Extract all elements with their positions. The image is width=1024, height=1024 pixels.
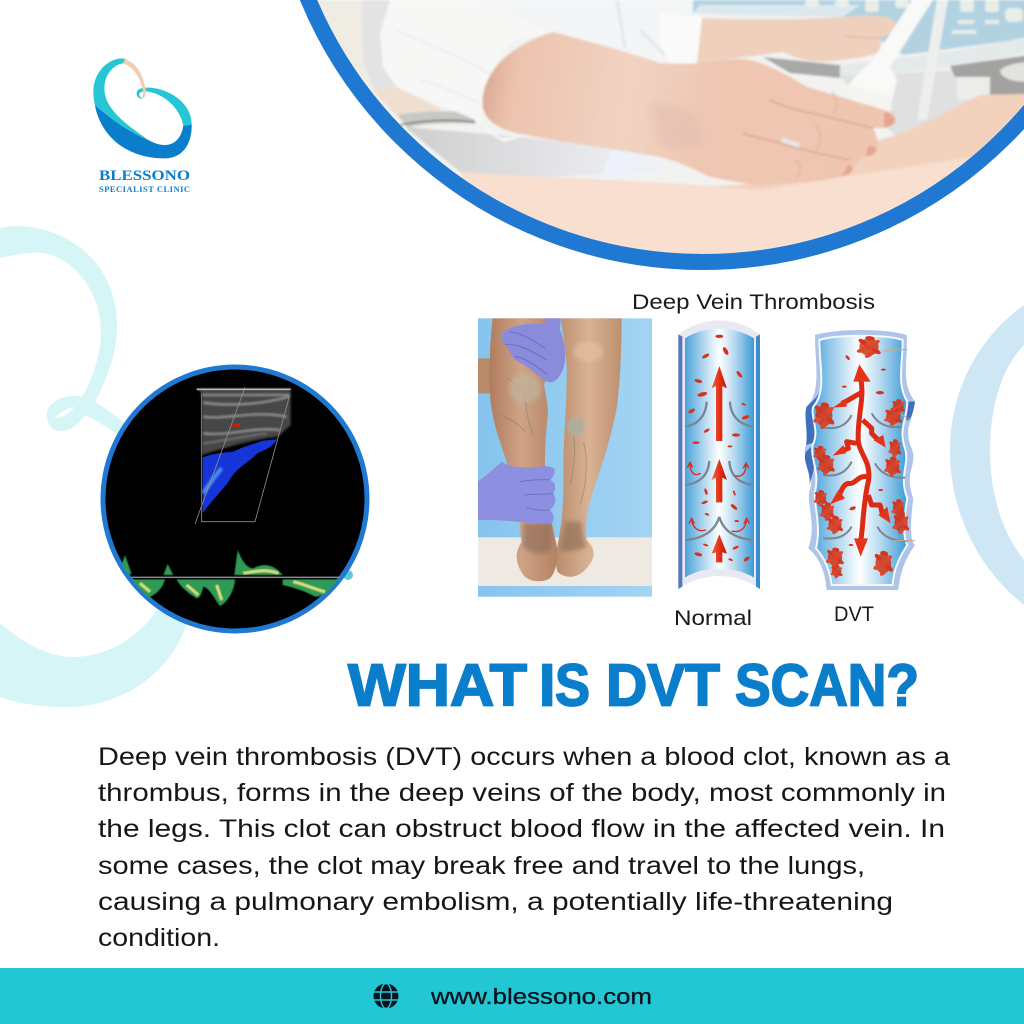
- body paragraph: the legs. This clot can obstruct blood flow in the affected vein. In: [98, 815, 945, 843]
- doppler scan circle image: [103, 367, 367, 631]
- main title: DVT: [606, 652, 720, 718]
- blood cells: [688, 335, 750, 562]
- background: right crescent decoration: [950, 305, 1024, 605]
- logo name: BLESSONO: [99, 168, 190, 184]
- body paragraph: thrombus, forms in the deep veins of the body, most commonly in: [98, 779, 946, 807]
- top gloved hand: [502, 318, 565, 382]
- clots: [813, 336, 910, 579]
- body paragraph: some cases, the clot may break free and travel to the lungs,: [98, 852, 865, 880]
- website url: www.blessono.com: [430, 984, 652, 1009]
- varicose vein marks: [500, 378, 586, 505]
- heading: deep vein thrombosis: Deep Vein Thrombosis: [632, 291, 875, 314]
- valve flaps: [820, 413, 907, 541]
- main title: [348, 652, 919, 718]
- left leg: [490, 318, 560, 581]
- diagram: normal vein: [678, 320, 760, 589]
- logo tagline: SPECIALIST CLINIC: [99, 184, 190, 194]
- branching thrombus arrows: [837, 378, 883, 542]
- clinic logo: [93, 58, 192, 194]
- right leg: [556, 318, 622, 577]
- flow arrows: [712, 366, 727, 562]
- diagram: DVT vein with clots: [805, 330, 915, 590]
- leg photo with gloved hands: [478, 318, 652, 597]
- loose cells: [842, 355, 886, 546]
- body paragraph: condition.: [98, 924, 220, 952]
- spectral waveform: [118, 550, 343, 606]
- valve flaps: [685, 402, 754, 540]
- main title: I: [539, 652, 555, 718]
- label: DVT: DVT: [834, 603, 874, 626]
- body paragraph: causing a pulmonary embolism, a potentially life-threatening: [98, 888, 893, 916]
- background: left ribbon decoration: [0, 226, 187, 707]
- colour doppler blue flow: [203, 439, 277, 513]
- icon: globe: [374, 984, 398, 1008]
- ankle shading: [523, 522, 587, 554]
- main title: S: [555, 652, 590, 718]
- small curved arrows: [687, 462, 749, 532]
- footer band: [0, 968, 1024, 1024]
- b-mode ultrasound texture: [197, 388, 291, 455]
- main title: WHAT: [348, 652, 527, 718]
- bottom gloved hand: [478, 462, 555, 523]
- hero photo: ultrasound exam in blue-rimmed circle: [275, 0, 1024, 280]
- body paragraph: [98, 743, 950, 952]
- arrow heads: [830, 364, 891, 557]
- body paragraph: Deep vein thrombosis (DVT) occurs when a blood clot, known as a: [98, 743, 950, 771]
- main title: SCAN?: [735, 652, 919, 718]
- logo mark: [93, 58, 192, 158]
- sample box outline: [195, 387, 289, 524]
- label: normal: Normal: [674, 607, 752, 630]
